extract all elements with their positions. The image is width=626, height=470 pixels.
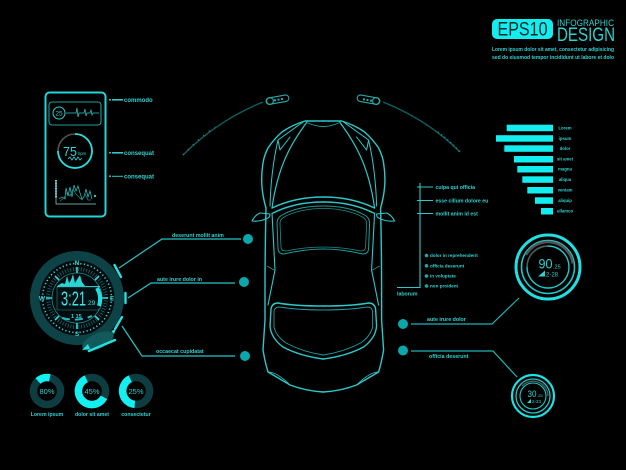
compass letters: W bbox=[39, 296, 46, 302]
description text bbox=[492, 47, 615, 61]
callout lines: ring gauges bbox=[398, 298, 519, 377]
compass ticks bbox=[46, 267, 108, 329]
watch gauge: 1 15 bbox=[71, 314, 82, 320]
donut: 45%: dolor sit amet bbox=[75, 412, 109, 418]
gauge arc left bbox=[183, 94, 289, 155]
bar chart: magna bbox=[558, 167, 573, 172]
donut: 80% bbox=[31, 378, 64, 418]
bar chart: dolor bbox=[560, 146, 571, 151]
watch buttons bbox=[114, 265, 126, 329]
car top view bbox=[252, 121, 395, 392]
bracket list: laborum: non proident bbox=[430, 284, 459, 288]
bpm ring gauge: 75 bbox=[63, 145, 77, 159]
callouts: phone labels: consequat bbox=[124, 174, 154, 180]
EPS10 badge: EPS10 bbox=[498, 20, 548, 40]
compass letters bbox=[39, 260, 115, 338]
ring gauge: small: .25 bbox=[537, 393, 543, 398]
panel: phone widget bbox=[46, 92, 106, 216]
bracket list: laborum: dolor in reprehenderit bbox=[430, 253, 478, 258]
donut: 80%: 80% bbox=[39, 387, 55, 396]
compass letters: E bbox=[110, 296, 115, 302]
callouts: phone labels: commodo bbox=[124, 98, 153, 104]
donut: 25% bbox=[121, 378, 151, 418]
digital display: 29 bbox=[88, 300, 96, 307]
ring gauge: large: 90 bbox=[538, 256, 553, 272]
callout lines: watch: deserunt mollit anim bbox=[172, 233, 224, 239]
heading bbox=[557, 18, 615, 46]
gauge arc right bbox=[357, 94, 460, 152]
ring gauge: small: 30 bbox=[528, 389, 536, 400]
bar chart: aliquip bbox=[558, 198, 572, 203]
bar chart bbox=[496, 125, 574, 214]
bracket list: laborum: mollit anim id est bbox=[436, 212, 478, 218]
heading: INFOGRAPHIC bbox=[557, 18, 614, 29]
donut: 80%: Lorem ipsum bbox=[31, 412, 64, 418]
bpm ring gauge bbox=[58, 134, 92, 168]
donut charts bbox=[31, 378, 151, 418]
bracket list: laborum: culpa qui officia bbox=[436, 185, 475, 191]
callout lines: ring gauges: officia deserunt bbox=[429, 354, 469, 360]
ring gauge: large bbox=[516, 235, 580, 299]
compass letters: S bbox=[75, 331, 80, 338]
bar chart: ipsum bbox=[559, 136, 572, 141]
side arc highlights bbox=[97, 288, 100, 306]
bracket list: laborum: esse cillum dolore eu bbox=[436, 198, 488, 204]
bar chart: veniam bbox=[558, 188, 573, 193]
bar chart: Lorem bbox=[558, 126, 572, 130]
ring gauge: large: 2-28 bbox=[546, 272, 559, 278]
donut: 25%: 25% bbox=[128, 387, 144, 396]
pulse panel: 25 bbox=[55, 110, 63, 118]
callouts: phone labels bbox=[109, 98, 154, 180]
bpm ring gauge: bpm bbox=[78, 151, 87, 156]
car: left half bbox=[252, 121, 323, 392]
bar chart: aliqua bbox=[559, 177, 572, 182]
donut: 45% bbox=[75, 378, 109, 418]
watch gauge bbox=[30, 251, 126, 355]
ring gauge: large: .25 bbox=[553, 264, 561, 270]
mini chart bbox=[57, 274, 85, 286]
ring gauge: small: 2-23 bbox=[532, 399, 542, 404]
car: right half bbox=[323, 121, 395, 392]
callout lines: ring gauges: aute irure dolor bbox=[427, 317, 466, 323]
bar chart: ullamco bbox=[557, 208, 573, 214]
ring gauge: small bbox=[512, 375, 554, 417]
callout lines: watch: occaecat cupidatat bbox=[156, 349, 204, 355]
mirror bbox=[252, 213, 270, 221]
bar chart: sit amet bbox=[557, 156, 574, 162]
digital display: 3:21 bbox=[61, 288, 86, 310]
callouts: phone labels: consequat bbox=[124, 151, 154, 157]
description text: sed do eiusmod tempor incididunt ut labore et dolo bbox=[492, 55, 615, 61]
header: EPS10 infographic design bbox=[492, 18, 615, 61]
line chart bbox=[56, 180, 96, 204]
callout lines: watch: aute irure dolor in bbox=[157, 277, 202, 283]
donut: 25%: consectetur bbox=[121, 412, 151, 418]
compass letters: N bbox=[75, 260, 80, 267]
bracket list: laborum: officia deserunt bbox=[430, 264, 465, 268]
bracket list: laborum: in voluptate bbox=[430, 274, 456, 278]
bracket list: laborum: laborum bbox=[397, 292, 418, 298]
callout lines: watch bbox=[119, 233, 253, 361]
donut: 45%: 45% bbox=[84, 387, 100, 396]
bracket list: laborum bbox=[397, 183, 488, 298]
